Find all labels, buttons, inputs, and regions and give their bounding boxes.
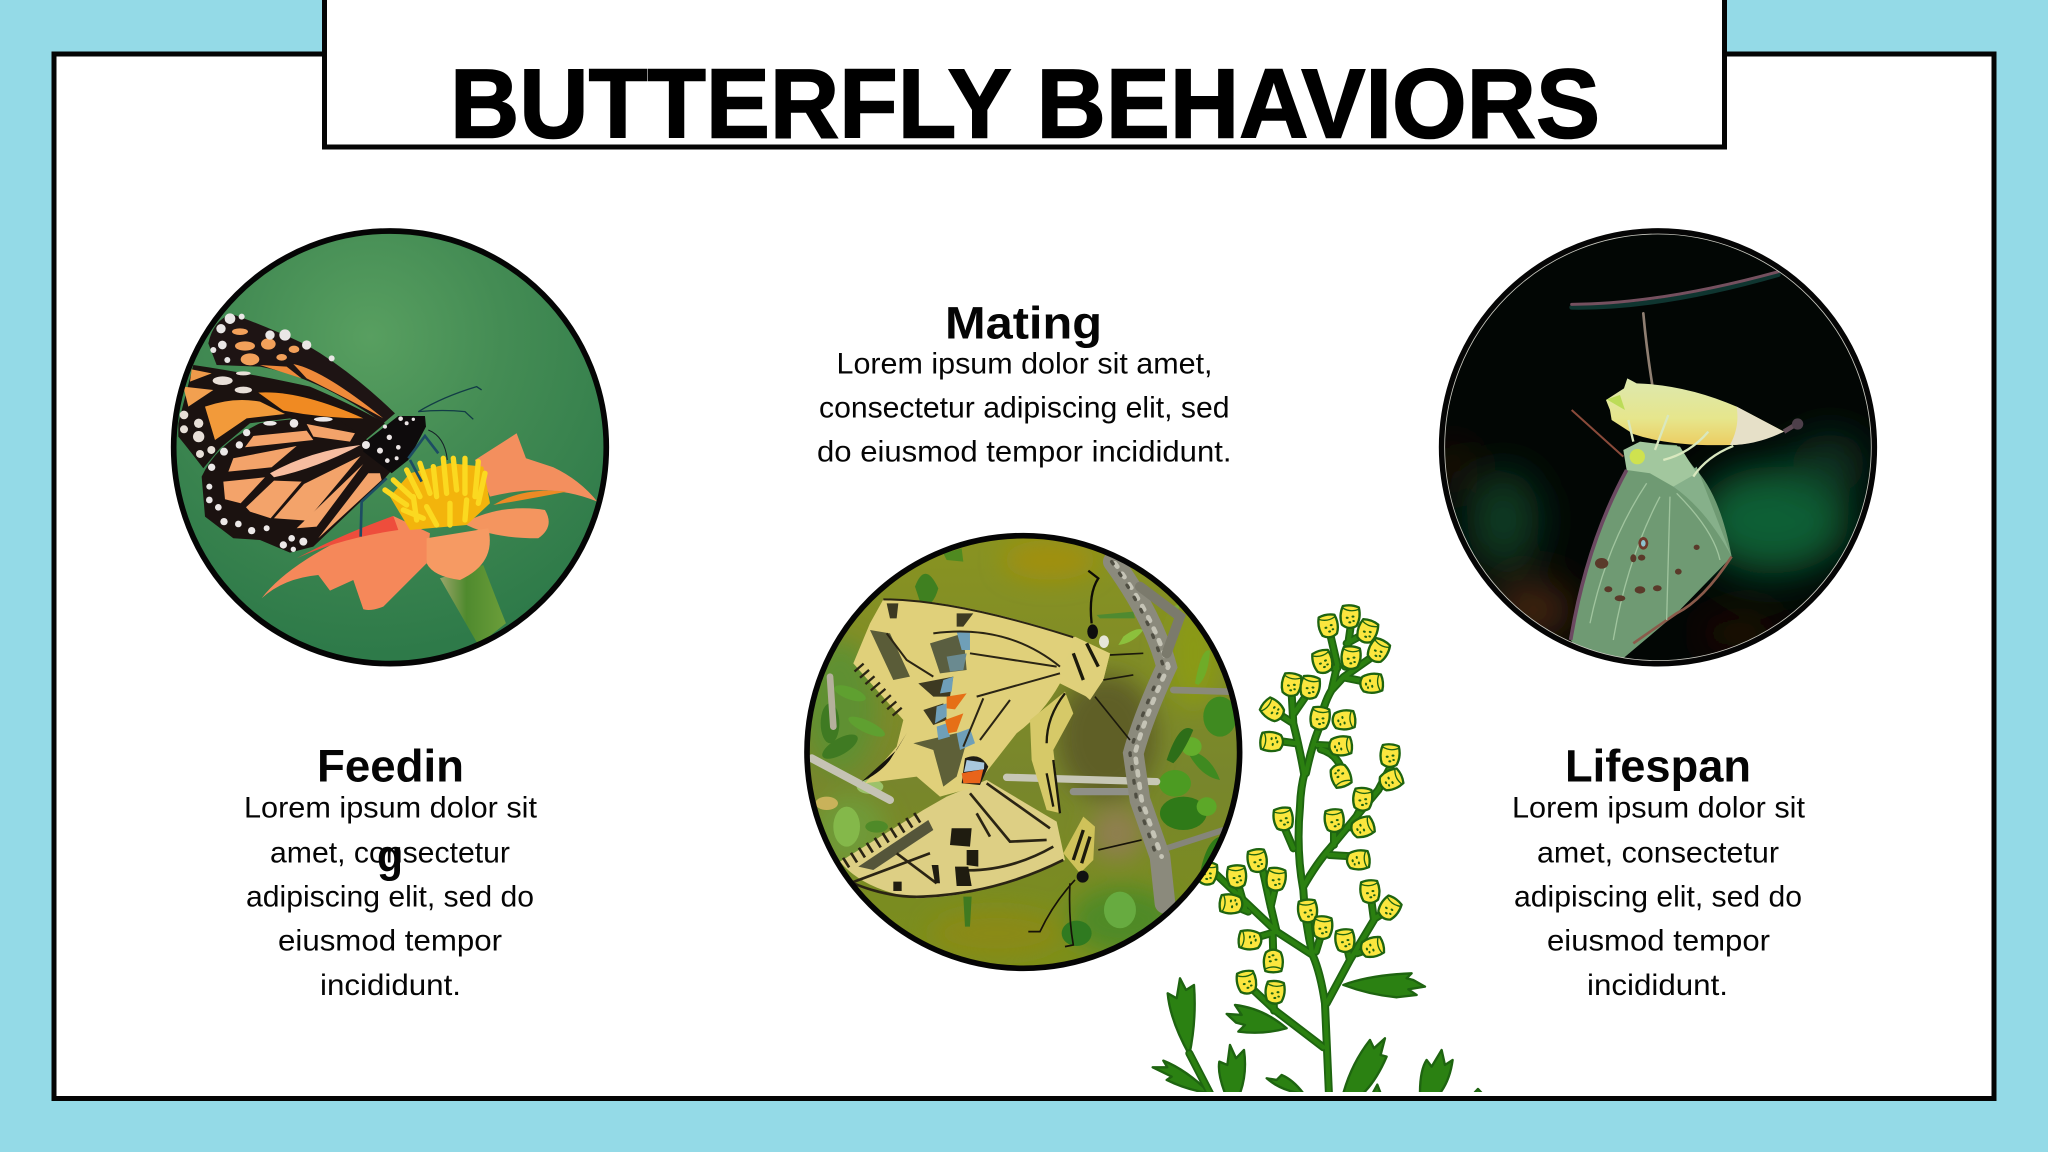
- body text: feeding: amet, consectetur: [270, 836, 510, 869]
- body text: lifespan: [1512, 792, 1805, 1002]
- plant flower buds: [1196, 605, 1405, 1004]
- body text: feeding: incididunt.: [320, 969, 461, 1002]
- butterfly: [1571, 410, 1733, 658]
- body text: lifespan: eiusmod tempor: [1547, 925, 1770, 958]
- body text: mating: Lorem ipsum dolor sit amet,: [836, 347, 1212, 380]
- body text: lifespan: incididunt.: [1587, 969, 1728, 1002]
- photo border: [1442, 231, 1874, 664]
- upper butterfly: [853, 571, 1143, 813]
- photo circle: monarch butterfly feeding on flower: [170, 228, 610, 666]
- title: BUTTERFLY BEHAVIORS: [450, 48, 1600, 158]
- body text: feeding: eiusmod tempor: [278, 925, 502, 958]
- body text: lifespan: amet, consectetur: [1537, 836, 1779, 869]
- back forewing: [208, 313, 395, 423]
- text block: feeding: [244, 741, 537, 1002]
- heading: feeding (wrapped): g: [377, 831, 403, 882]
- chrysalis: [1606, 378, 1803, 445]
- body text: feeding: adipiscing elit, sed do: [246, 881, 534, 914]
- body text: feeding: Lorem ipsum dolor sit: [244, 792, 537, 825]
- heading: feeding (wrapped): [317, 741, 464, 882]
- photo circle: swallowtail butterflies mating: [804, 532, 1242, 972]
- heading: lifespan: Lifespan: [1565, 741, 1751, 792]
- wing patterns: [870, 603, 973, 787]
- twig and thread: [1572, 272, 1778, 385]
- text block: lifespan: [1512, 741, 1805, 1002]
- eyespot: [962, 756, 988, 785]
- photo border: [174, 231, 606, 664]
- left foliage detail: [815, 682, 888, 847]
- title box: [324, 0, 1724, 158]
- body text: mating: [817, 347, 1232, 469]
- body text: lifespan: Lorem ipsum dolor sit: [1512, 792, 1805, 825]
- body text: mating: consectetur adipiscing elit, sed: [819, 391, 1230, 424]
- plant stems: [1189, 627, 1391, 1095]
- decorative plant illustration: [1153, 605, 1482, 1095]
- heading: feeding (wrapped): Feedin: [317, 741, 464, 792]
- hind wing: [202, 417, 395, 553]
- lower butterfly: [840, 780, 1142, 947]
- body text: mating: do eiusmod tempor incididunt.: [817, 436, 1232, 469]
- photo circle: butterfly emerging from chrysalis: [1438, 228, 1878, 666]
- front forewing: [178, 365, 385, 468]
- flower stem: [440, 565, 506, 645]
- blurred background glow: [1440, 433, 1867, 650]
- plant leaves: [1153, 973, 1482, 1093]
- photo border: [807, 536, 1240, 968]
- twigs and branch: [812, 562, 1230, 903]
- butterfly body: [361, 387, 482, 537]
- leaves: [915, 548, 1237, 946]
- body text: lifespan: adipiscing elit, sed do: [1514, 881, 1802, 914]
- body text: feeding: [244, 792, 537, 1002]
- flower: [262, 433, 597, 610]
- heading: mating: Mating: [945, 297, 1102, 348]
- blurred foliage background: [803, 540, 1220, 957]
- text block: mating: [817, 297, 1232, 469]
